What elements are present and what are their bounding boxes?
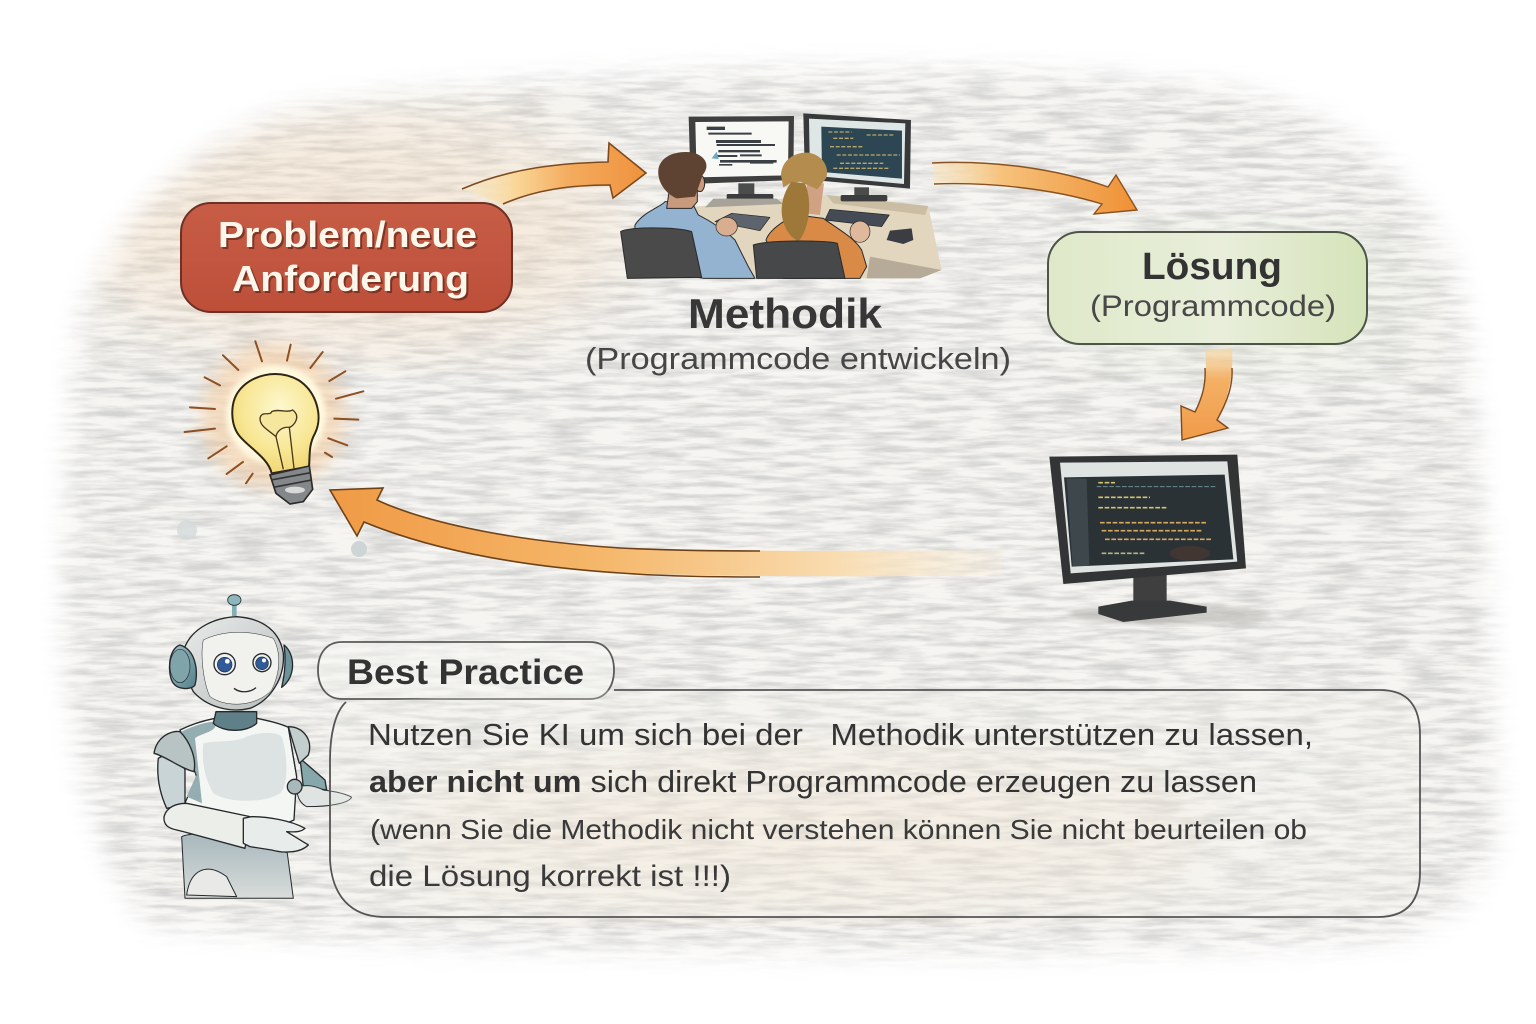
back arm (300, 758, 327, 790)
arrow: methodology to solution (932, 162, 1137, 214)
heading: Methodik (585, 290, 1011, 376)
heading: Best Practice: Best Practice (347, 653, 584, 692)
left monitor (689, 116, 794, 207)
box: Problem/neue Anforderung (181, 203, 512, 312)
torso (180, 718, 297, 843)
illustration: robot assistant (154, 595, 352, 898)
box: Lösung (1048, 232, 1367, 344)
box: Lösung: (Programmcode) (1090, 290, 1336, 323)
box: Problem/neue Anforderung: Problem/neue (218, 214, 477, 255)
box: Problem/neue Anforderung: Problem/neue (220, 216, 479, 257)
decorative dots (177, 520, 367, 557)
arrow: deployed code back to idea (330, 488, 1002, 577)
keyboards (715, 213, 770, 231)
box: Problem/neue Anforderung: Anforderung (232, 258, 469, 299)
panel: best practice text (330, 690, 1420, 917)
box: Lösung: Lösung (1142, 246, 1282, 288)
ear pieces (169, 645, 196, 689)
icon: light bulb (185, 341, 363, 504)
antenna (232, 605, 237, 616)
head (184, 617, 283, 710)
body text line 2: aber nicht um sich direkt Programmcode erzeugen zu lassen (369, 764, 1257, 799)
man (621, 152, 755, 278)
heading: Methodik: (Programmcode entwickeln) (585, 341, 1011, 376)
robot lower body (182, 834, 293, 898)
illustration: monitor with code (1049, 455, 1270, 625)
arrow: problem to methodology (462, 143, 646, 204)
body text line 3: (wenn Sie die Methodik nicht verstehen können Sie nicht beurteilen ob (370, 814, 1307, 845)
body text line 1: Nutzen Sie KI um sich bei der Methodik unterstützen zu lassen, (368, 717, 1313, 752)
box: Problem/neue Anforderung: Anforderung (234, 260, 471, 301)
heading: Best Practice (318, 642, 614, 699)
heading: Methodik: Methodik (688, 290, 883, 337)
eyes (214, 653, 235, 675)
upper arm (158, 755, 185, 808)
illustration: developers at workstations (621, 113, 942, 278)
hands (243, 817, 308, 852)
arrow: solution to screen (1181, 348, 1232, 440)
desk (695, 195, 942, 278)
neck (213, 712, 257, 730)
right monitor (803, 113, 911, 201)
body text line 4: die Lösung korrekt ist !!!) (369, 860, 731, 893)
woman (753, 153, 870, 278)
